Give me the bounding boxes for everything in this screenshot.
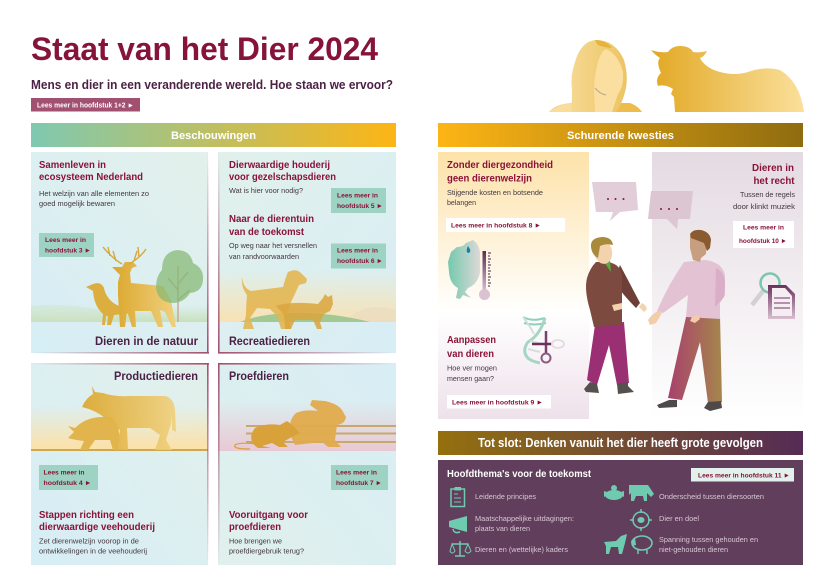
- link button: chapter 3: hoofdstuk 3 ►: [45, 248, 91, 254]
- text: Leidende principes: Leidende principes: [475, 492, 536, 501]
- text: randvoorwaarden: Op weg naar het versnellen: [229, 243, 317, 250]
- heading: Zonder diergezondheid: Zonder diergezondheid: [447, 160, 553, 171]
- text: kosten: belangen: [447, 200, 476, 207]
- text: Maatschappelijke uitdagingen: Maatschappelijke uitdagingen:: [475, 514, 574, 523]
- link button: chapter 3: [39, 233, 94, 257]
- heading: Samenleven in ecosysteem Nederland: [39, 160, 143, 183]
- link button: chapter 9: [447, 395, 551, 408]
- icon: mouse: [235, 421, 300, 449]
- heading: Samenleven in ecosysteem Nederland: ecosysteem Nederland: [39, 172, 143, 183]
- text: regels: Tussen de regels: [740, 192, 796, 199]
- panel: Recreatiedieren: [218, 152, 396, 354]
- link button: chapter 5: [331, 188, 386, 213]
- heading: Naar de dierentuin: van de toekomst: [229, 227, 305, 238]
- icon: bird: [86, 283, 133, 325]
- icon: clipboard: [451, 487, 464, 506]
- link button: chapter 7: Lees meer in: [336, 470, 377, 476]
- icon: cat: [276, 294, 333, 329]
- text: wettelijke kaders: Dieren en (wettelijke) kaders: [475, 545, 568, 554]
- heading: Aanpassen van dieren: Aanpassen: [447, 335, 496, 346]
- text: Maatschappelijke uitdagingen: plaats van dieren: [475, 524, 530, 533]
- text: Spanning: [659, 535, 758, 554]
- link button: chapter 6: hoofdstuk 6 ►: [337, 258, 383, 265]
- text: proefdiergebruik: Hoe brengen we: [229, 538, 282, 546]
- speech bubble right: [648, 191, 693, 229]
- link button: chapter 1+2: Lees meer in hoofdstuk 1+2 ►: [37, 102, 134, 110]
- link button: chapter 6: [331, 244, 386, 268]
- text: kosten: [447, 190, 543, 207]
- text: proefdiergebruik: [229, 538, 304, 556]
- icon: sheep: [631, 536, 652, 554]
- link button: chapter 11: Lees meer in hoofdstuk 11 ►: [698, 472, 790, 480]
- caption: Recreatiedieren: Recreatiedieren: [229, 335, 310, 348]
- text: welzijn: goed mogelijk bewaren: [39, 201, 115, 208]
- icon: magnifier and document: [752, 274, 795, 319]
- illustration: sheep: [651, 46, 804, 112]
- text: Spanning: niet-gehouden dieren: [659, 545, 728, 554]
- heading: Stappen richting: Stappen richting een: [39, 510, 134, 521]
- panel: Proefdieren: [218, 363, 396, 565]
- heading: Beschouwingen: Beschouwingen: [171, 130, 256, 142]
- caption: Proefdieren: Proefdieren: [229, 370, 289, 383]
- heading: Dieren in het recht: het recht: [754, 176, 795, 187]
- text: randvoorwaarden: [229, 243, 317, 261]
- panel: Dieren in de natuur: [31, 152, 209, 354]
- icon: cow: [629, 485, 654, 501]
- link button: chapter 10: [733, 221, 794, 248]
- heading: Samenleven in ecosysteem Nederland: Samenleven in: [39, 160, 106, 171]
- heading: Naar de dierentuin: [229, 214, 314, 238]
- heading: Dierwaardige houderij: [229, 160, 336, 183]
- speech bubble left: [592, 182, 638, 221]
- text: dierenwelzijn: ontwikkelingen in de veehouderij: [39, 548, 147, 556]
- link button: chapter 4: [39, 465, 98, 490]
- text: dierenwelzijn: [39, 538, 147, 556]
- heading: Zonder diergezondheid: geen dierenwelzijn: [447, 174, 532, 184]
- icon: scales: [450, 541, 471, 556]
- illustration: man left: [584, 237, 647, 394]
- link button: chapter 4: hoofdstuk 4 ►: [44, 480, 92, 487]
- link button: chapter 10: hoofdstuk 10 ►: [739, 238, 787, 245]
- heading: Hoofdthema's voor de toekomst: Hoofdthema's voor de toekomst: [447, 469, 592, 480]
- heading: Tot slot: [438, 431, 803, 455]
- text: Onderscheid: Onderscheid tussen diersoorten: [659, 492, 764, 501]
- text: welzijn: [39, 191, 149, 208]
- heading: Dieren in het recht: Dieren in: [752, 163, 794, 174]
- panel: Hoofdthema's: [438, 460, 803, 565]
- text: regels: [733, 192, 796, 211]
- icon: dog: [242, 270, 307, 329]
- link button: chapter 10: Lees meer in: [743, 224, 784, 232]
- heading: Vooruitgang: [229, 510, 308, 533]
- text: Dier en doel: Dier en doel: [659, 514, 699, 523]
- text: kosten: Stijgende kosten en botsende: [447, 190, 543, 197]
- text: welzijn: Het welzijn van alle elementen zo: [39, 191, 149, 198]
- caption: Dieren in de natuur: Dieren in de natuur: [95, 335, 198, 348]
- link button: chapter 8: [446, 218, 565, 232]
- text: randvoorwaarden: van randvoorwaarden: [229, 254, 299, 261]
- heading: Stappen richting: dierwaardige veehouderij: [39, 522, 155, 533]
- text: hoe ver: Hoe ver mogen: [447, 366, 497, 372]
- icon: pig: [68, 417, 120, 450]
- heading: Beschouwingen: [31, 123, 396, 147]
- subtitle: Mens en dier in een veranderende wereld. Hoe staan we ervoor?: [31, 78, 393, 92]
- icon: rabbit: [290, 400, 346, 447]
- heading: Schurende kwesties: Schurende kwesties: [567, 130, 674, 142]
- caption: Productiedieren: Productiedieren: [114, 370, 198, 383]
- icon: DNA and scissors: [523, 317, 564, 363]
- illustration: man right: [648, 230, 725, 411]
- icon: bee: [604, 485, 624, 500]
- panel: Schurende kwesties left: [438, 152, 589, 419]
- illustration: woman: [549, 40, 642, 112]
- icon: cow: [82, 386, 176, 450]
- heading: Dierwaardige houderij: voor gezelschapsdieren: [229, 172, 336, 183]
- text: hoe ver: [447, 366, 497, 383]
- heading: Aanpassen van dieren: van dieren: [447, 349, 494, 360]
- text: hoe ver: mensen gaan?: [447, 376, 494, 383]
- icon: megaphone: [449, 516, 467, 533]
- heading: Vooruitgang: Vooruitgang voor: [229, 510, 308, 521]
- icon: target with chicken: [630, 509, 652, 531]
- text: Maatschappelijke uitdagingen: [475, 514, 574, 533]
- panel: Schurende kwesties right: [652, 152, 803, 419]
- icon: chicken: [448, 240, 480, 299]
- heading: Dieren in het recht: [752, 163, 795, 187]
- link button: chapter 7: [331, 465, 388, 490]
- text: regels: door klinkt muziek: [733, 204, 796, 211]
- title: Staat van het Dier 2024: [31, 31, 378, 67]
- heading: Stappen richting: [39, 510, 155, 533]
- icon: cage bars: [246, 425, 396, 443]
- link button: chapter 7: hoofdstuk 7 ►: [336, 480, 382, 487]
- link button: chapter 5: Lees meer in: [337, 192, 378, 200]
- heading: Zonder diergezondheid: [447, 160, 553, 184]
- icon: thermometer: [479, 251, 491, 300]
- heading: Schurende kwesties: [438, 123, 803, 147]
- heading: Aanpassen van dieren: [447, 335, 496, 360]
- icon: tree: [156, 250, 203, 322]
- link button: chapter 8: Lees meer in hoofdstuk 8 ►: [451, 222, 541, 230]
- text: proefdiergebruik: proefdiergebruik terug?: [229, 548, 304, 556]
- link button: chapter 1+2: [31, 98, 140, 112]
- heading: Vooruitgang: proefdieren: [229, 522, 281, 533]
- panel: Productiedieren: [31, 363, 209, 565]
- link button: chapter 11: [691, 468, 794, 482]
- text: wat is nodig: Wat is hier voor nodig?: [229, 188, 303, 195]
- link button: chapter 4: Lees meer in: [44, 470, 84, 476]
- link button: chapter 3: Lees meer in: [45, 237, 86, 244]
- icon: deer: [103, 247, 176, 327]
- text: Spanning: Spanning tussen gehouden en: [659, 535, 758, 544]
- link button: chapter 9: Lees meer in hoofdstuk 9 ►: [452, 400, 543, 406]
- heading: Tot slot: Tot slot: Denken vanuit het dier heeft grote gevolgen: [478, 436, 763, 450]
- link button: chapter 6: Lees meer in: [337, 248, 378, 254]
- link button: chapter 5: hoofdstuk 5 ►: [337, 203, 383, 210]
- heading: Naar de dierentuin: Naar de dierentuin: [229, 214, 314, 225]
- heading: Dierwaardige houderij: Dierwaardige houderij: [229, 160, 330, 171]
- text: dierenwelzijn: Zet dierenwelzijn voorop in de: [39, 538, 139, 546]
- icon: wolf: [604, 534, 627, 554]
